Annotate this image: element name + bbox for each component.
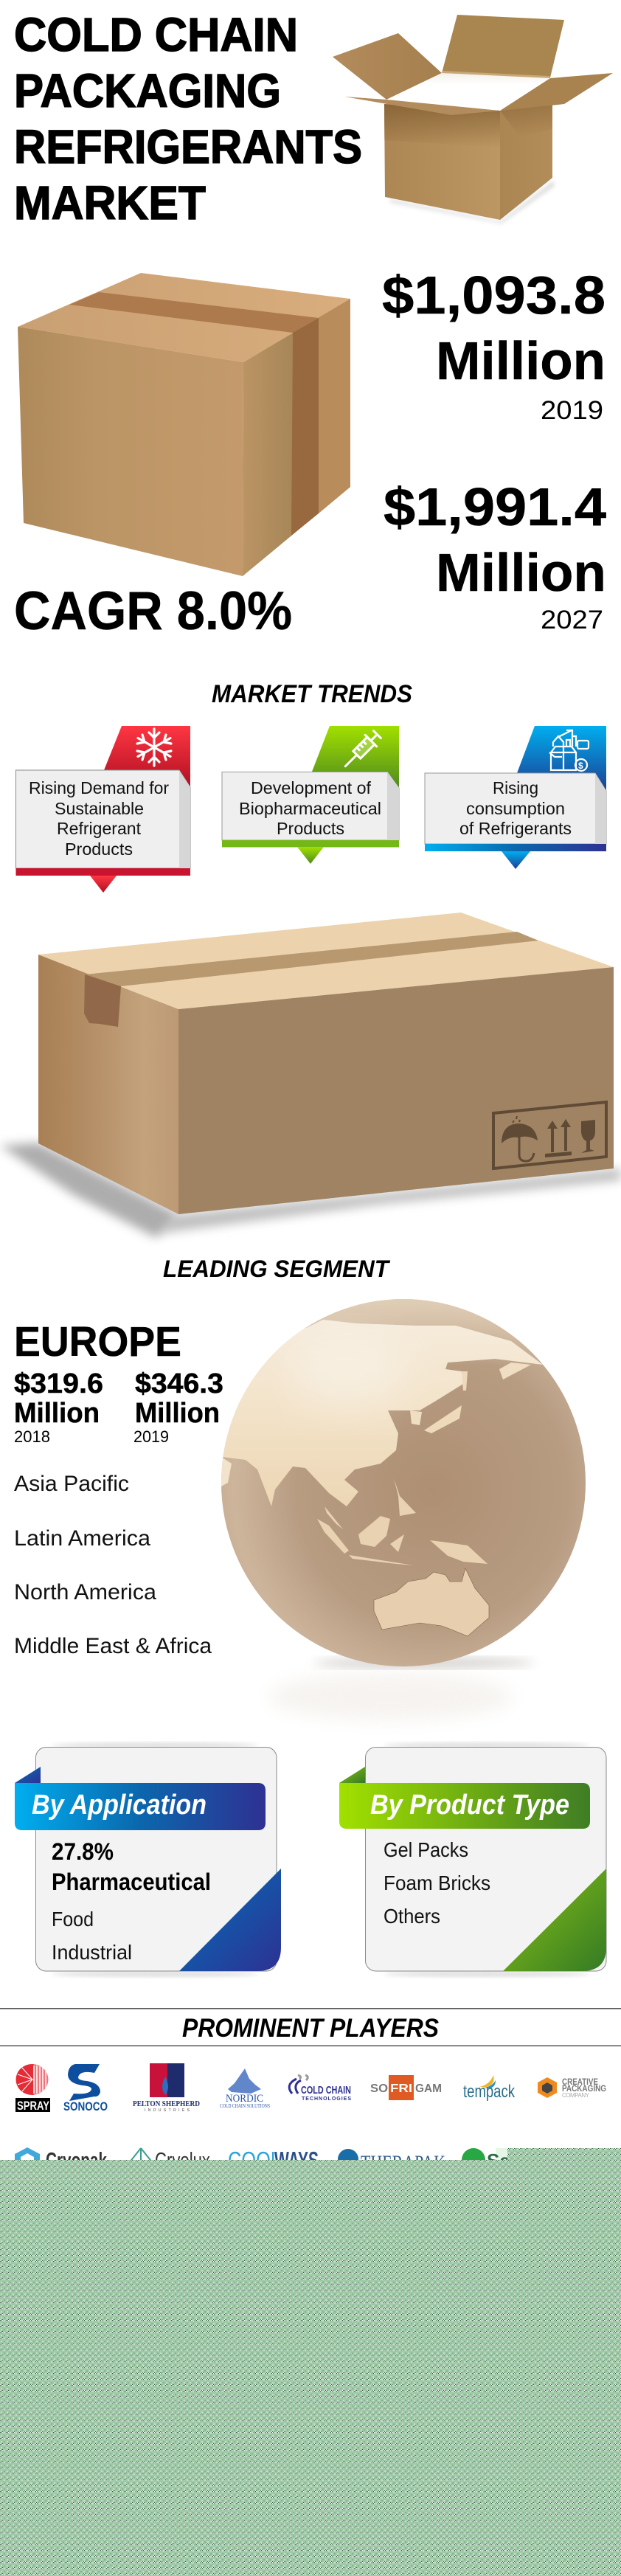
panel: by application xyxy=(15,1742,281,1977)
logo: Tempack xyxy=(463,2075,516,2102)
icon: closed cardboard box xyxy=(18,273,350,576)
icon: open cardboard box xyxy=(333,15,613,224)
logo: Cryopak xyxy=(15,2147,108,2172)
icon: large cardboard box xyxy=(0,913,621,1238)
title: COLD CHAIN xyxy=(14,8,298,61)
heading: by product type: By Product Type xyxy=(370,1790,569,1821)
stat: 2019 market value: Million xyxy=(436,332,606,391)
logo: Pelton Shepherd: PELTON SHEPHERD xyxy=(133,2099,200,2108)
panel: refrigerant consumption trend: consumption xyxy=(466,799,565,818)
logo: Cryolux: Cryolux xyxy=(155,2149,210,2172)
stat: Europe: $346.3 xyxy=(135,1368,223,1399)
panel: by application: Food xyxy=(52,1908,94,1931)
stat: 2019 market value: $1,093.8 xyxy=(382,266,606,325)
panel: refrigerant consumption trend: of Refrigerants xyxy=(459,819,572,838)
list: other regions: North America xyxy=(14,1580,156,1604)
heading: market trends: MARKET TRENDS xyxy=(212,680,412,708)
stat: 2027 market value: $1,991.4 xyxy=(384,478,606,537)
panel: sustainable refrigerant trend: Refrigerant xyxy=(57,819,142,838)
list: other regions: Asia Pacific xyxy=(14,1472,129,1496)
logo: Creative Packaging: PACKAGING xyxy=(562,2083,606,2094)
icon: handling marks xyxy=(493,1102,606,1168)
logo: Sofrigam: FRI xyxy=(390,2082,412,2095)
heading: by application xyxy=(15,1783,266,1830)
stat: Europe: Million xyxy=(14,1398,100,1429)
stat: 2027 market value xyxy=(384,478,606,634)
panel: by product type: Foam Bricks xyxy=(384,1872,490,1894)
panel: refrigerant consumption trend: Rising xyxy=(493,778,538,797)
logo: Spray xyxy=(15,2064,50,2113)
stat: 2027 market value: Million xyxy=(436,544,606,603)
panel: by product type xyxy=(339,1742,606,1977)
logo: Creative Packaging xyxy=(538,2077,606,2099)
stat: 2027 market value: 2027 xyxy=(541,606,603,634)
panel: by application: 27.8% xyxy=(52,1838,114,1865)
logo: Spray: SPRAY xyxy=(17,2099,50,2113)
logo: Coolways: WAYS xyxy=(274,2147,319,2174)
logo: Therapak xyxy=(338,2149,445,2175)
stat: 2019 market value: 2019 xyxy=(541,396,603,425)
title: PACKAGING xyxy=(14,64,281,117)
logo: Sonoco xyxy=(63,2064,108,2113)
logo: Cryopak: Cryopak xyxy=(46,2149,108,2172)
logo: Pelton Shepherd xyxy=(133,2063,200,2113)
icon: syringe xyxy=(312,726,399,788)
stat: Europe xyxy=(14,1318,223,1446)
stat: 2019 market value xyxy=(382,266,606,425)
logo: partial green brand: Sa xyxy=(487,2150,510,2172)
panel: by product type: Gel Packs xyxy=(384,1838,468,1861)
panel: refrigerant consumption trend xyxy=(425,726,606,869)
panel: sustainable refrigerant trend xyxy=(16,726,190,893)
stat: Europe: 2018 xyxy=(14,1427,50,1446)
stat: Europe: $319.6 xyxy=(14,1368,103,1399)
logo: Nordic: NORDIC xyxy=(226,2093,263,2105)
list: other regions: Latin America xyxy=(14,1526,150,1551)
icon: wooden globe xyxy=(207,1299,586,1720)
logo: Tempack: tempack xyxy=(463,2082,516,2102)
title: MARKET xyxy=(14,176,206,229)
logo: Cold Chain Technologies: TECHNOLOGIES xyxy=(302,2097,351,2102)
logo: Nordic xyxy=(220,2068,270,2109)
heading: by application: By Application xyxy=(32,1790,207,1821)
patterned cover over lower page xyxy=(0,2148,621,2576)
icon: snowflake xyxy=(104,726,190,787)
stat: Europe: Million xyxy=(135,1398,220,1429)
list: other regions: Middle East & Africa xyxy=(14,1634,212,1658)
logo: Cryolux xyxy=(129,2148,210,2172)
title xyxy=(14,8,362,229)
panel: sustainable refrigerant trend: Rising Demand for xyxy=(29,778,169,797)
panel: biopharmaceutical trend: Development of xyxy=(251,778,372,797)
icon: market growth box xyxy=(517,726,606,791)
logo: Creative Packaging: CREATIVE xyxy=(562,2077,598,2087)
logo: Sofrigam: SO xyxy=(370,2082,388,2095)
panel: biopharmaceutical trend: Biopharmaceutical xyxy=(239,799,381,818)
logo: Cold Chain Technologies xyxy=(289,2075,351,2102)
icon: market growth box: $ xyxy=(578,761,583,771)
logo: Nordic: COLD CHAIN SOLUTIONS xyxy=(220,2103,270,2109)
heading: by product type xyxy=(339,1783,590,1829)
title: REFRIGERANTS xyxy=(14,120,362,173)
logo: Creative Packaging: COMPANY xyxy=(562,2092,590,2099)
panel: by application: Pharmaceutical xyxy=(52,1869,211,1895)
logo: Coolways: COOL xyxy=(228,2147,281,2174)
heading: prominent players: PROMINENT PLAYERS xyxy=(182,2014,439,2043)
panel: biopharmaceutical trend xyxy=(222,726,399,864)
logo: Sonoco: SONOCO xyxy=(63,2099,108,2113)
stat: Europe: EUROPE xyxy=(14,1318,181,1365)
panel: sustainable refrigerant trend: Sustainable xyxy=(55,799,144,818)
logo: partial green brand xyxy=(462,2148,510,2172)
logo: Sofrigam xyxy=(370,2075,442,2100)
heading: leading segment: LEADING SEGMENT xyxy=(163,1256,390,1282)
panel: by application: Industrial xyxy=(52,1941,132,1964)
stat: CAGR: CAGR 8.0% xyxy=(14,581,292,641)
logo: Therapak: THERAPAK xyxy=(361,2151,445,2175)
panel: by product type: Others xyxy=(384,1905,440,1928)
logo: Cold Chain Technologies: COLD CHAIN xyxy=(301,2084,351,2097)
stat: Europe: 2019 xyxy=(133,1427,169,1446)
panel: biopharmaceutical trend: Products xyxy=(277,819,344,838)
list: other regions xyxy=(14,1472,212,1658)
logo: Pelton Shepherd: INDUSTRIES xyxy=(145,2108,190,2113)
panel: sustainable refrigerant trend: Products xyxy=(65,839,133,859)
logo: Sofrigam: GAM xyxy=(415,2082,442,2095)
